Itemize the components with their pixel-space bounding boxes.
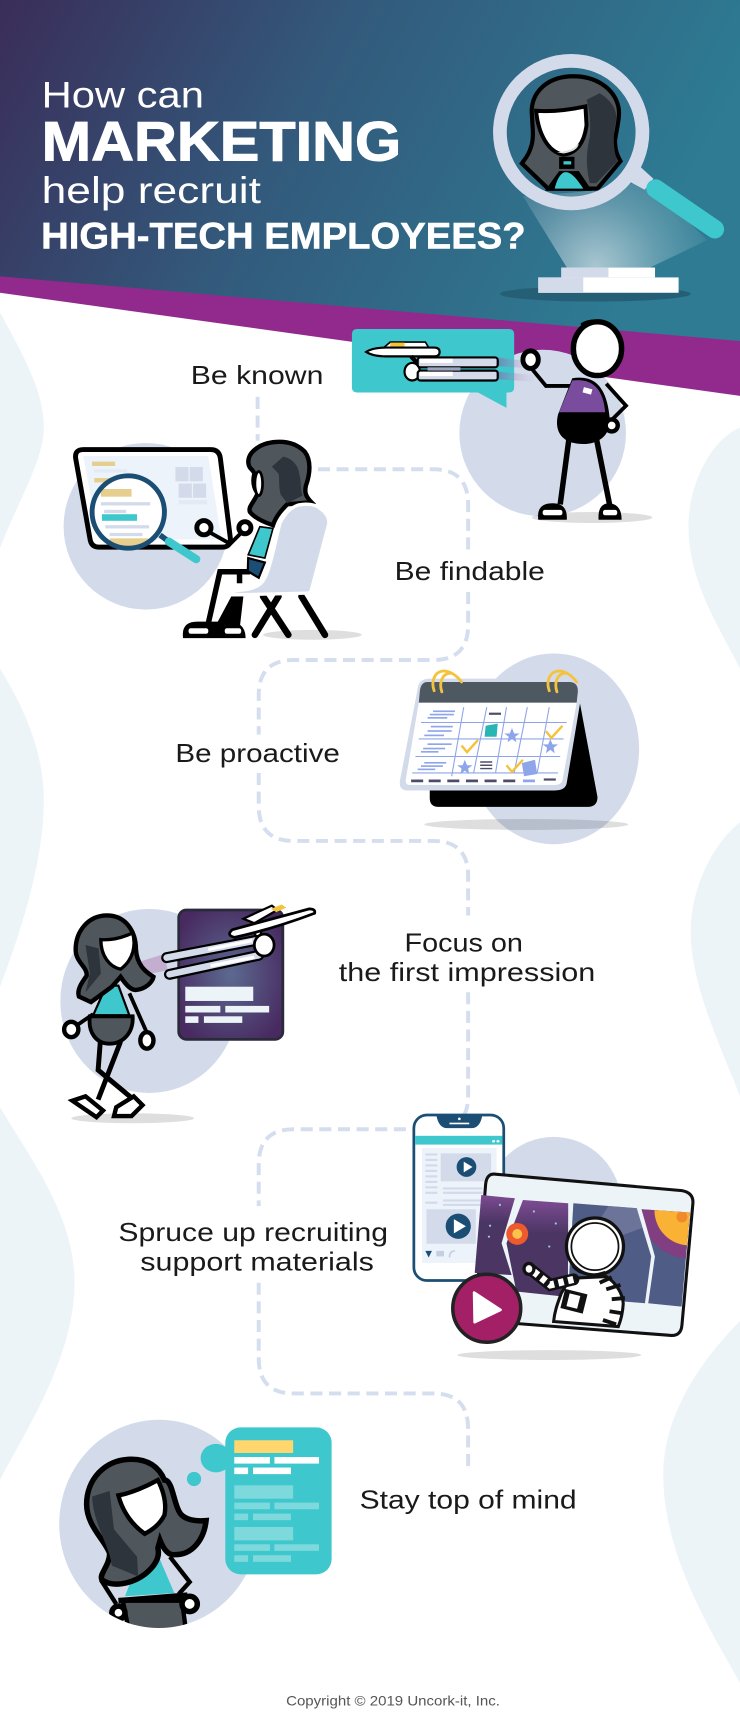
circle — [59, 1420, 259, 1628]
video card — [474, 1172, 694, 1337]
purple band — [0, 274, 740, 396]
shadow — [263, 630, 362, 640]
shadow — [71, 1113, 194, 1123]
dashed path — [258, 397, 468, 1471]
label: support materials: Spruce up recruiting — [118, 1217, 388, 1247]
label: be findable: Be findable — [395, 556, 545, 586]
magnifier — [92, 476, 196, 559]
shadow — [424, 819, 628, 830]
circle — [459, 350, 626, 516]
figure — [523, 321, 626, 520]
ship with beams — [140, 904, 315, 976]
background waves — [0, 312, 740, 1683]
section: stay top of mind — [59, 1420, 332, 1634]
title: How can — [42, 73, 204, 115]
title: help recruit — [42, 169, 262, 211]
copyright: Copyright © 2019 Uncork-it, Inc. — [286, 1693, 500, 1708]
title — [41, 73, 526, 256]
header gradient — [0, 0, 740, 341]
label: first impression — [339, 928, 595, 987]
label: be known: Be known — [191, 360, 323, 390]
section: be proactive — [400, 653, 639, 844]
label: support materials — [118, 1217, 388, 1277]
section: first impression — [60, 904, 315, 1123]
icon: magnifier on pedestal — [500, 61, 715, 302]
speech bubble with ship — [352, 329, 534, 408]
circle — [60, 909, 238, 1093]
label: first impression: the first impression — [339, 957, 595, 987]
thinking woman — [87, 1459, 206, 1634]
play button — [453, 1274, 521, 1342]
thought card — [187, 1427, 332, 1574]
section: be findable — [64, 442, 362, 640]
label: be proactive: Be proactive — [175, 738, 340, 768]
label: first impression: Focus on — [405, 928, 523, 958]
section: support materials — [412, 1114, 694, 1360]
phone — [414, 1115, 504, 1281]
circle — [64, 443, 228, 610]
walking woman — [64, 915, 153, 1117]
title: MARKETING — [42, 110, 401, 173]
circle — [468, 653, 639, 844]
calendar — [400, 671, 597, 807]
label: stay top of mind: Stay top of mind — [360, 1485, 577, 1515]
circle — [486, 1137, 622, 1275]
section: be known — [352, 321, 652, 523]
shadow — [457, 1350, 641, 1360]
label: support materials: support materials — [140, 1247, 374, 1277]
seated person — [183, 442, 329, 638]
header panel — [0, 0, 740, 396]
astronaut — [524, 1218, 625, 1327]
tablet — [179, 910, 283, 1039]
monitor — [76, 450, 230, 547]
shadow — [532, 512, 652, 523]
title: HIGH-TECH EMPLOYEES? — [41, 214, 526, 256]
